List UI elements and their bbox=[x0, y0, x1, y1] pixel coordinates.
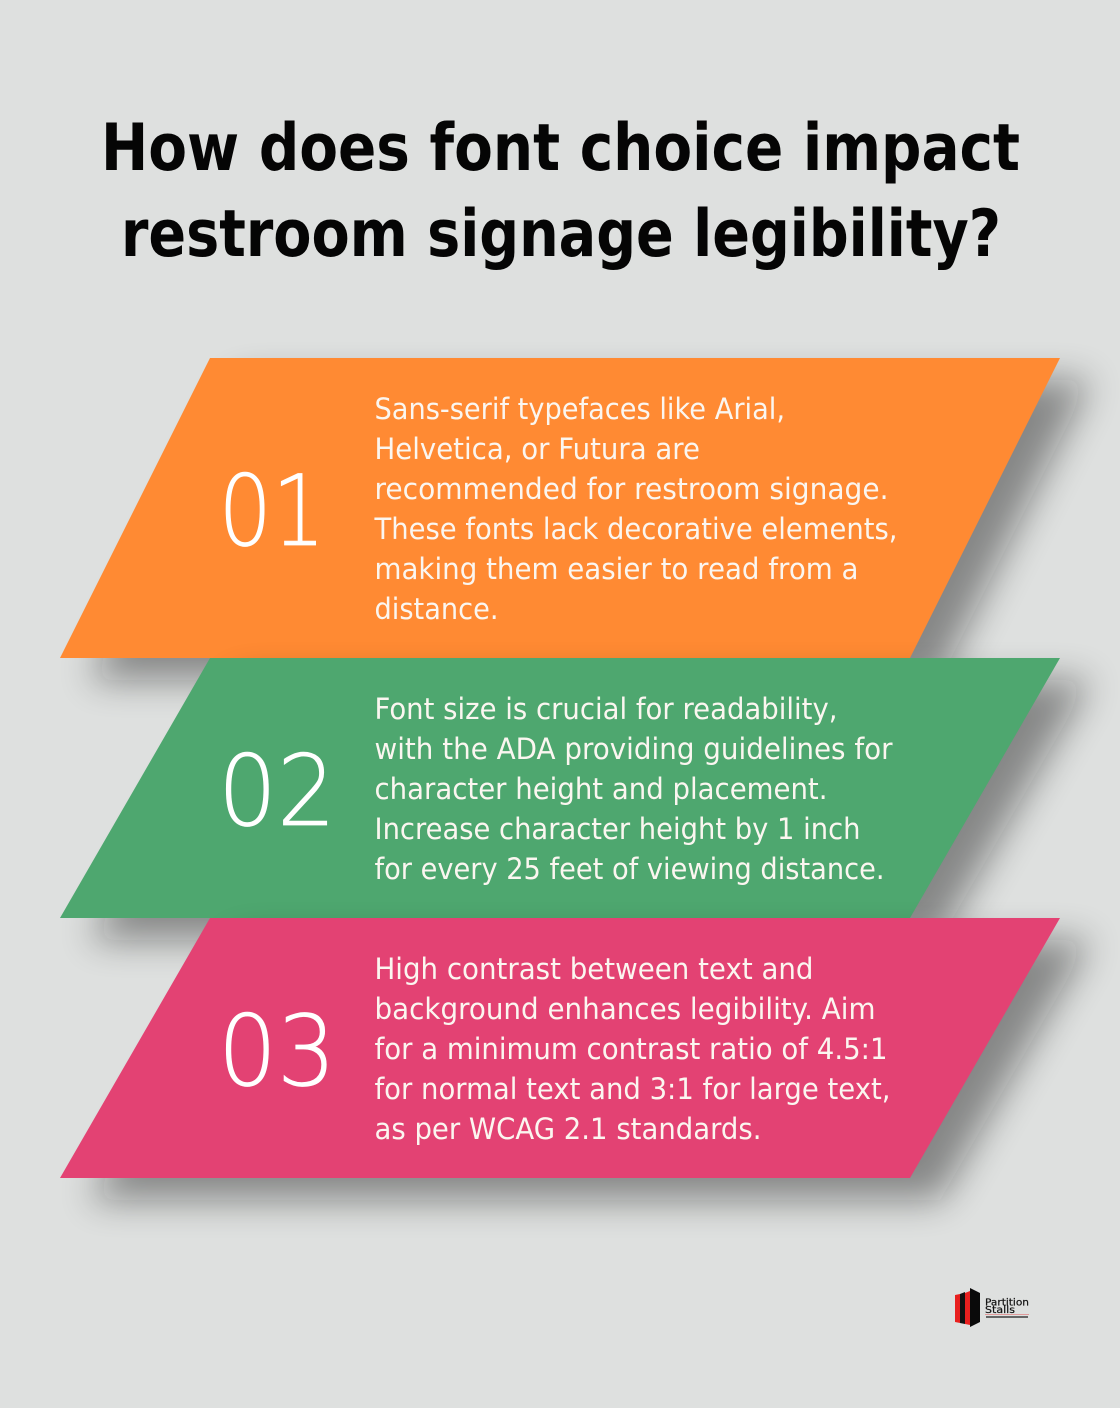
number 02: 02 bbox=[218, 735, 336, 849]
orange parallelogram bbox=[60, 358, 1060, 658]
text: step 02 bbox=[374, 692, 893, 886]
logo wordmark: Partition bbox=[985, 1298, 1029, 1308]
text: step 02: Font size is crucial for readability, bbox=[374, 692, 838, 726]
number 03: 03 bbox=[218, 995, 336, 1109]
text: step 03: background enhances legibility. Aim bbox=[374, 992, 876, 1026]
text: step 03: for normal text and 3:1 for large text, bbox=[374, 1072, 890, 1106]
text: step 02: Increase character height by 1 inch bbox=[374, 812, 860, 846]
text: step 03: High contrast between text and bbox=[374, 952, 814, 986]
logo: Partition Stalls bbox=[955, 1288, 1029, 1327]
green parallelogram bbox=[60, 658, 1060, 918]
panel: step 03 bbox=[60, 918, 1090, 1200]
text: step 03 bbox=[374, 952, 890, 1146]
text: step 02: for every 25 feet of viewing distance. bbox=[374, 852, 884, 886]
logo wordmark: Stalls bbox=[985, 1305, 1015, 1316]
logo wordmark bbox=[985, 1298, 1029, 1318]
number 01: 01 bbox=[218, 455, 326, 569]
text: step 01: Helvetica, or Futura are bbox=[374, 432, 700, 466]
text: step 01: These fonts lack decorative elements, bbox=[374, 512, 898, 546]
text: step 03: as per WCAG 2.1 standards. bbox=[374, 1112, 762, 1146]
text: step 01: making them easier to read from a bbox=[374, 552, 858, 586]
panel: step 02 bbox=[60, 658, 1090, 940]
text: step 01: recommended for restroom signage. bbox=[374, 472, 888, 506]
text: step 01: distance. bbox=[374, 592, 498, 626]
title bbox=[101, 111, 1020, 272]
text: step 01: Sans-serif typefaces like Arial, bbox=[374, 392, 785, 426]
text: step 02: with the ADA providing guidelines for bbox=[374, 732, 893, 766]
text: step 03: for a minimum contrast ratio of 4.5:1 bbox=[374, 1032, 888, 1066]
panel: step 01 bbox=[60, 358, 1090, 680]
pink parallelogram bbox=[60, 918, 1060, 1178]
icon: partition bars bbox=[955, 1288, 980, 1327]
title: restroom signage legibility? bbox=[121, 197, 1001, 272]
text: step 02: character height and placement. bbox=[374, 772, 828, 806]
text: step 01 bbox=[374, 392, 898, 626]
